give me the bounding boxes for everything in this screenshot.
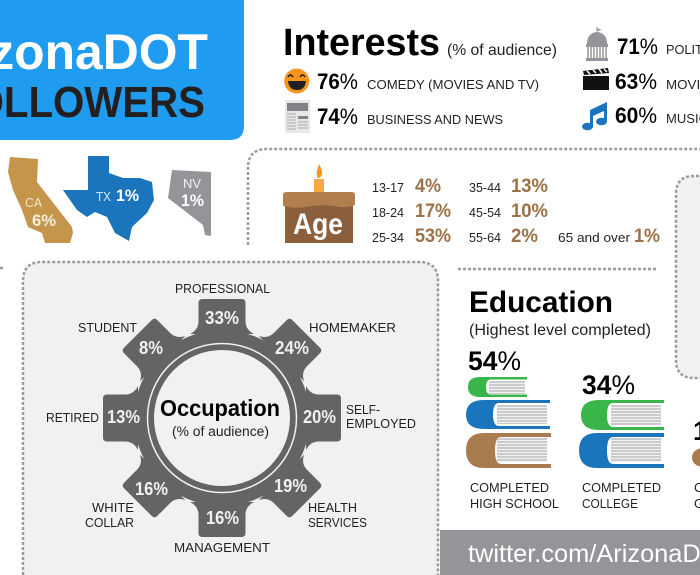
- interest: politics: [617, 34, 700, 59]
- heading: education: [469, 286, 651, 339]
- icon: smiley: [284, 68, 309, 94]
- heading: interests: [283, 22, 557, 64]
- state: Texas: TX: [96, 189, 111, 204]
- age table: 10%: [511, 201, 548, 222]
- education: college: COLLEGE: [582, 496, 638, 511]
- education: college: [579, 370, 664, 511]
- occupation category labels: HOMEMAKER: [309, 320, 396, 335]
- chart: occupation gear: [103, 299, 341, 537]
- chart: occupation gear: 24%: [275, 338, 309, 358]
- occupation category labels: COLLAR: [85, 515, 134, 530]
- occupation category labels: SERVICES: [308, 515, 367, 530]
- age table: 18-24: [372, 206, 404, 220]
- interest: comedy: 76%: [317, 69, 358, 94]
- interest: business and news: [317, 104, 503, 129]
- education: high school: [466, 346, 559, 511]
- age table: [372, 176, 660, 247]
- icon: newspaper: [285, 100, 310, 133]
- age table: 17%: [415, 201, 451, 222]
- icon: clapperboard: [583, 68, 609, 90]
- age table: 35-44: [469, 181, 501, 195]
- education: graduate: [692, 416, 700, 511]
- chart: occupation gear: 8%: [139, 338, 163, 358]
- title banner: [0, 0, 244, 140]
- occupation centre label: Occupation: [160, 395, 280, 421]
- occupation category labels: WHITE: [92, 500, 134, 515]
- occupation centre label: (% of audience): [172, 424, 269, 439]
- chart: occupation gear: 13%: [107, 407, 140, 427]
- education: high school: 54%: [468, 346, 521, 376]
- interest: movies: [615, 69, 700, 94]
- icon: age cake: Age: [293, 208, 343, 241]
- icon: capitol: [586, 27, 608, 61]
- age table: 55-64: [469, 231, 501, 245]
- age table: 2%: [511, 226, 538, 247]
- occupation category labels: HEALTH: [308, 500, 357, 515]
- state: California: 6%: [32, 211, 56, 230]
- interest: comedy: [317, 69, 539, 94]
- state: Texas: [63, 156, 154, 241]
- heading: interests: Interests: [283, 22, 440, 64]
- panel: occupation: [23, 262, 438, 575]
- chart: occupation gear: 33%: [205, 308, 239, 328]
- panel: right side callout: [676, 176, 700, 378]
- chart: occupation gear: 16%: [135, 479, 168, 499]
- state: Nevada: 1%: [181, 191, 204, 210]
- footer: twitter link: [440, 530, 700, 575]
- interest: music: [615, 103, 700, 128]
- state: California: [8, 157, 73, 243]
- interest: politics: 71%: [617, 34, 658, 59]
- chart: occupation gear: 20%: [303, 407, 336, 427]
- education: high school: HIGH SCHOOL: [470, 496, 559, 511]
- chart: occupation gear: 19%: [274, 476, 307, 496]
- icon: age cake: [283, 164, 355, 243]
- occupation category labels: STUDENT: [78, 320, 137, 335]
- age table: 25-34: [372, 231, 404, 245]
- occupation category labels: [46, 281, 416, 555]
- occupation category labels: RETIRED: [46, 410, 99, 425]
- interest: movies: 63%: [615, 69, 657, 94]
- occupation centre label: [160, 395, 280, 439]
- panel: age and interests divider: [248, 149, 700, 245]
- heading: education: Education: [469, 286, 613, 319]
- state: Nevada: NV: [183, 176, 201, 191]
- interest: music: 60%: [615, 103, 657, 128]
- divider marks: [0, 268, 658, 269]
- age table: 1%: [634, 226, 660, 247]
- occupation category labels: MANAGEMENT: [174, 540, 270, 555]
- age table: 53%: [415, 226, 451, 247]
- education: college: 34%: [582, 370, 635, 400]
- occupation category labels: PROFESSIONAL: [175, 281, 270, 296]
- heading: education: (Highest level completed): [469, 322, 651, 339]
- icon: music notes: [582, 102, 607, 130]
- heading: interests: (% of audience): [447, 42, 557, 59]
- age table: 45-54: [469, 206, 501, 220]
- education: college: COMPLETED: [582, 480, 661, 495]
- education: high school: COMPLETED: [470, 480, 549, 495]
- age table: 13%: [511, 176, 548, 197]
- state: Texas: 1%: [116, 186, 139, 205]
- chart: occupation gear: 16%: [206, 508, 239, 528]
- state: Nevada: [168, 170, 211, 236]
- interest: comedy: COMEDY (MOVIES AND TV): [367, 77, 539, 92]
- occupation category labels: SELF-: [346, 402, 380, 417]
- interest: business and news: 74%: [317, 104, 358, 129]
- age table: 13-17: [372, 181, 404, 195]
- age table: 65 and over: [558, 231, 630, 245]
- interest: business and news: BUSINESS AND NEWS: [367, 112, 503, 127]
- age table: 4%: [415, 176, 441, 197]
- state: California: CA: [25, 195, 42, 210]
- occupation category labels: EMPLOYED: [346, 416, 416, 431]
